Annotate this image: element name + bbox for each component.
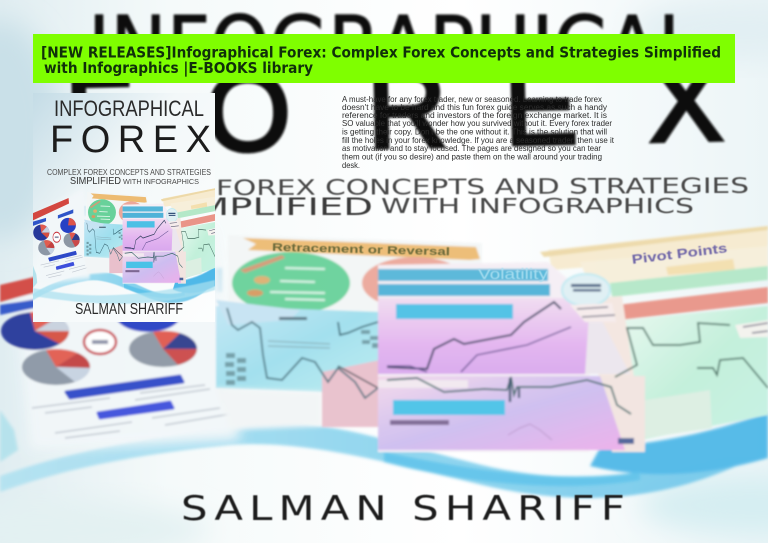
book description text: A must-have for any forex trader, new or seasoned. Learning to trade forex bbox=[342, 95, 602, 104]
cover title: INFOGRAPHICAL: INFOGRAPHICAL bbox=[54, 96, 204, 121]
cover illustration bbox=[33, 188, 215, 303]
book description text: SO valuable that you'll wonder how you survived without it. Every forex trader bbox=[342, 119, 612, 128]
book description text: as motivation and to stay focused. The pages are designed so you can tear bbox=[342, 144, 601, 153]
cover subtitle: with infographics: WITH INFOGRAPHICS bbox=[123, 177, 199, 186]
cover subtitle: simplified: SIMPLIFIED bbox=[70, 175, 121, 187]
panel label: Retracement or Reversal: Retracement or Reversal bbox=[272, 242, 450, 258]
banner title line 2: with Infographics |E-BOOKS library bbox=[44, 59, 313, 78]
background subtitle: simplified: SIMPLIFIED bbox=[160, 193, 373, 221]
green title banner bbox=[33, 34, 735, 83]
book description text: fill the holes in your forex knowledge. If you are a seasoned trader, then use it bbox=[342, 136, 615, 145]
background author name: SALMAN SHARIFF bbox=[181, 489, 631, 529]
panel label: Pivot Points: Pivot Points bbox=[631, 240, 728, 267]
book description text: reference for traders and investors of the foreign exchange market. It is bbox=[342, 111, 607, 120]
book description text: doesn't have to be hard and this fun forex guide serves as such a handy bbox=[342, 103, 607, 112]
cover title: FOREX: FOREX bbox=[50, 119, 211, 161]
book description text: desk. bbox=[342, 161, 360, 170]
book description text: them out (if you so desire) and paste them on the wall around your trading bbox=[342, 152, 602, 162]
book cover bbox=[33, 93, 215, 322]
cover wave bbox=[33, 280, 215, 304]
cover author: SALMAN SHARIFF bbox=[75, 301, 183, 318]
background subtitle: with infographics: WITH INFOGRAPHICS bbox=[381, 194, 694, 218]
large background title: FOREX: FOREX bbox=[64, 41, 724, 179]
cover subtitle: COMPLEX FOREX CONCEPTS AND STRATEGIES bbox=[47, 167, 211, 177]
background illustration: chart panels and pie charts bbox=[0, 225, 768, 498]
background subtitle: concepts line: FOREX CONCEPTS AND STRATEGIES bbox=[216, 174, 749, 201]
book description text: is getting their copy. Don't be the one without it. This is the solution that will bbox=[342, 128, 607, 136]
book description text bbox=[342, 95, 615, 170]
panel label: Volatility: Volatility bbox=[478, 266, 549, 283]
large background title: INFOGRAPHICAL: INFOGRAPHICAL bbox=[88, 0, 700, 96]
banner title line 1: [NEW RELEASES]Infographical Forex: Complex Forex Concepts and Strategies Simplified bbox=[41, 44, 721, 62]
